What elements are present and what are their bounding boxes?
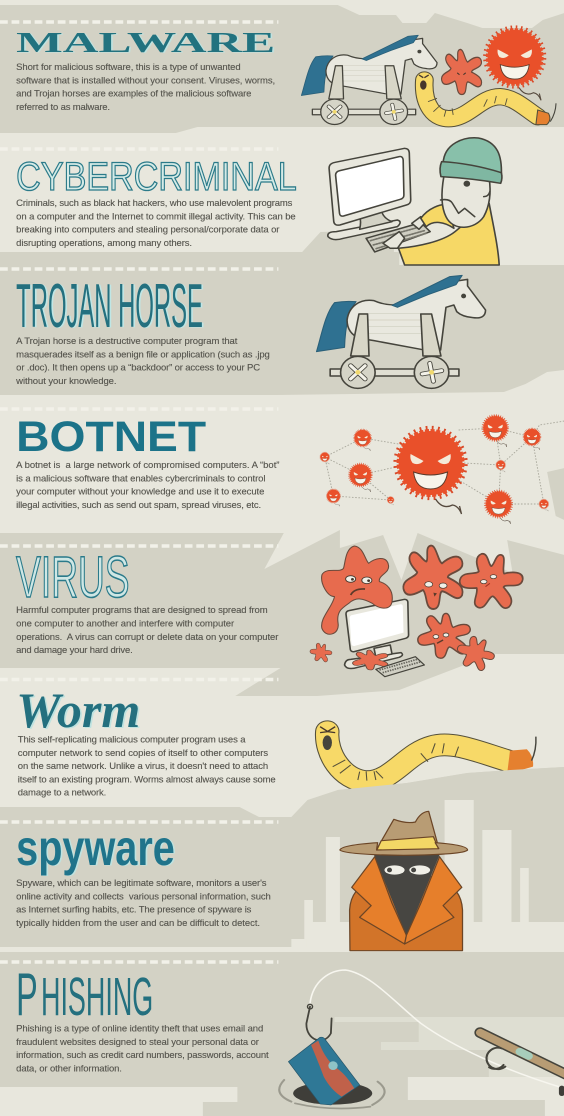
virus blob top right: [452, 545, 530, 618]
text: botnet description: [16, 460, 279, 510]
text: malware description: [16, 62, 275, 112]
text: phishing description: Phishing is a type of online identity theft that uses email and: [16, 1024, 263, 1033]
virus blob under computer: [353, 650, 388, 670]
heading: virus: VIRUS: [16, 544, 129, 609]
hat brim: [340, 843, 468, 855]
face: [442, 177, 490, 227]
heading: worm: Worm: [16, 684, 140, 739]
rod: [480, 1033, 564, 1079]
panel: trojan horse: [15, 271, 486, 388]
computer base: [328, 220, 400, 240]
heading: spyware: spyware: [18, 821, 176, 877]
text: spyware description: Spyware, which can be legitimate software, monitors a user's: [16, 878, 267, 888]
virus faces: [346, 575, 497, 643]
computer base: [345, 653, 402, 669]
text: phishing description: information, such as credit card numbers, passwords, account: [16, 1050, 269, 1060]
icons: small network viruses: [320, 415, 549, 524]
virus blob tiny: [307, 640, 334, 665]
heading: phishing: [16, 962, 153, 1028]
virus blob lower: [415, 610, 473, 662]
text: trojan horse description: without your knowledge.: [15, 376, 117, 386]
text: botnet description: illegal activities, such as send out spam, spread viruses, etc.: [16, 500, 261, 510]
text: spyware description: [16, 878, 271, 928]
keyboard: [366, 223, 430, 252]
heading: malware: MALWARE: [18, 27, 277, 59]
text: virus description: one computer to another and interfere with computer: [16, 619, 234, 628]
right edge shape: [547, 468, 564, 520]
spy eyes: [384, 865, 405, 875]
icon: fishing rod hook and credit card: [279, 970, 564, 1109]
icon: blob virus: [442, 49, 482, 94]
heading: malware: [16, 26, 277, 59]
panel: virus: [16, 544, 530, 677]
rod ring: [486, 1048, 505, 1069]
arm: [421, 205, 454, 228]
text: trojan horse description: or .doc). It then opens up a “backdoor” or access to your PC: [16, 363, 260, 373]
phishing lighter steps: [0, 1017, 564, 1116]
beanie: [443, 138, 501, 175]
heading: spyware: spyware: [16, 821, 175, 877]
hole: [293, 1082, 372, 1105]
text: virus description: [16, 605, 278, 655]
text: spyware description: as Internet surfing habits, etc. The presence of spyware is: [16, 905, 252, 915]
text: spyware description: online activity and collects various personal information, such: [16, 892, 271, 901]
band: trojan horse background: [0, 230, 564, 395]
hand: [383, 232, 405, 248]
text: cybercriminal description: [16, 198, 296, 248]
heading: cybercriminal: CYBERCRIMINAL: [16, 153, 297, 199]
panel: trojan horse: TROJAN HORSE: [16, 271, 203, 340]
text: worm description: on the same network. Unlike a virus, it doesn't need to attach: [18, 761, 268, 771]
icon: central botnet virus: [395, 428, 466, 514]
panel: phishing: [16, 962, 564, 1109]
network links: [325, 421, 564, 504]
text: malware description: and Trojan horses are examples of the malicious software: [16, 89, 251, 99]
spy coat: [350, 877, 463, 951]
panel: phishing: HISHING: [41, 966, 153, 1027]
text: worm description: itself to an existing program. Worms almost always cause some: [18, 775, 276, 784]
hat crown: [376, 811, 439, 851]
text: virus description: operations. A virus can corrupt or delete data on your computer: [16, 632, 278, 642]
icon: large worm: [320, 727, 536, 782]
computer screen: [350, 604, 404, 646]
virus blob top middle: [403, 546, 463, 609]
panel: malware: [16, 26, 556, 125]
icon: spiky virus: [485, 27, 545, 100]
computer stand: [360, 210, 392, 229]
virus blob main: [322, 546, 392, 634]
spy collars: [352, 857, 406, 944]
heading: phishing: P: [16, 962, 38, 1028]
text: worm description: computer network to send copies of itself to other computers: [18, 748, 269, 758]
text: trojan horse description: A Trojan horse is a destructive computer program that: [16, 336, 238, 346]
panel: botnet: [16, 414, 564, 524]
band: phishing background: [0, 952, 564, 1116]
keyboard: [376, 657, 424, 677]
text: spyware description: typically hidden from the user and can be difficult to detect.: [16, 918, 260, 928]
text: cybercriminal description: breaking into computers and stealing personal/corporate data or: [16, 225, 279, 235]
worm ground cover: [324, 767, 564, 800]
fishing line: [310, 970, 564, 1088]
icon: worm: [419, 75, 556, 125]
hook: [306, 1007, 332, 1040]
icon: trojan horse small: [301, 35, 437, 124]
text: cybercriminal description: disrupting operations, among many others.: [16, 238, 192, 248]
text: malware description: referred to as malware.: [16, 102, 110, 112]
icon: spy: [340, 811, 468, 951]
text: botnet description: your computer without your knowledge and use it to execute: [16, 487, 264, 497]
text: virus description: and damage your hard drive.: [16, 645, 133, 655]
icon: trojan horse: [316, 275, 486, 388]
text: phishing description: data, or other information.: [16, 1064, 122, 1073]
computer monitor: [346, 599, 409, 652]
computer stand: [374, 645, 392, 657]
heading: worm: Worm: [18, 685, 142, 740]
text: malware description: software that is installed without your consent. Viruses, worms,: [16, 76, 275, 85]
heading: malware: MALWARE: [16, 26, 275, 59]
text: botnet description: A botnet is a large network of compromised computers. A “bot”: [16, 460, 279, 470]
text: worm description: damage to a network.: [18, 788, 106, 798]
hat band: [377, 837, 439, 851]
computer monitor: [329, 148, 411, 225]
computer screen: [336, 157, 404, 216]
credit card: [288, 1037, 360, 1105]
icons: virus cluster and computer: [307, 545, 530, 677]
ripples: [279, 1080, 385, 1105]
panel: cybercriminal: [16, 138, 502, 265]
text: worm description: [18, 735, 276, 798]
skyline: [0, 780, 564, 952]
hacker body: [398, 203, 499, 265]
band: spyware background: [0, 767, 564, 947]
text: malware description: Short for malicious software, this is a type of unwanted: [16, 62, 241, 72]
virus blob lower small: [451, 631, 500, 676]
heading: trojan horse: [16, 271, 204, 341]
text: virus description: Harmful computer programs that are designed to spread from: [16, 605, 268, 615]
text: botnet description: is a malicious software that enables cybercriminals to control: [16, 474, 265, 483]
text: worm description: This self-replicating malicious computer program uses a: [18, 735, 246, 744]
text: cybercriminal description: Criminals, such as black hat hackers, who use malevolent programs: [16, 198, 293, 208]
text: phishing description: [16, 1024, 269, 1073]
spy face: [374, 855, 439, 936]
text: trojan horse description: masquerades itself as a benign file or application (such as .jpg: [16, 350, 270, 359]
text: trojan horse description: [15, 336, 270, 386]
dashed divider rows: [0, 22, 278, 962]
band: virus background: [0, 530, 564, 696]
icon: computer and hacker: [328, 138, 502, 265]
band: malware background: [0, 5, 564, 133]
panel: spyware: [16, 811, 468, 951]
panel: worm: [16, 684, 564, 800]
text: phishing description: fraudulent websites designed to steal your personal data or: [16, 1037, 259, 1047]
text: cybercriminal description: on a computer and the Internet to commit illegal activity. This can be: [16, 212, 296, 221]
heading: botnet: BOTNET: [16, 414, 206, 461]
panel: trojan horse: TROJAN HORSE: [18, 272, 204, 341]
